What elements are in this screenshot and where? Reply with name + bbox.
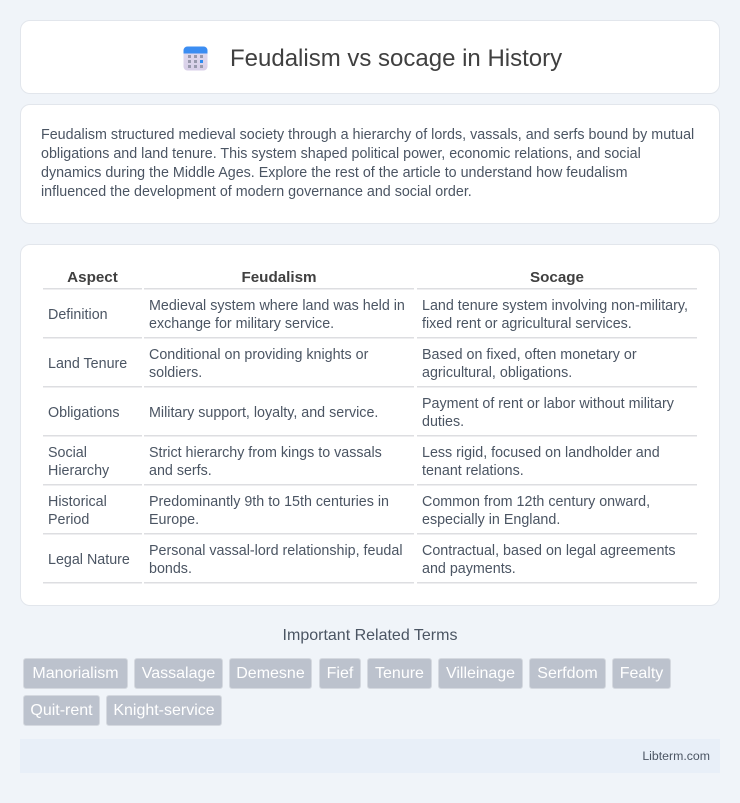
panel: header <box>20 20 720 94</box>
row: Land Tenure <box>48 347 637 381</box>
text block: introduction: obligations and land tenure. This system shaped political power, economic relations, and social <box>41 146 641 162</box>
row: Legal Nature: and payments. <box>422 561 516 577</box>
row: Obligations: Military support, loyalty, and service. <box>149 405 378 421</box>
row: Historical Period: Historical <box>48 494 107 510</box>
row: Definition: Definition <box>48 307 108 323</box>
row: Social Hierarchy: and serfs. <box>149 463 212 479</box>
row: Land Tenure: agricultural, obligations. <box>422 365 572 381</box>
row: Social Hierarchy: Strict hierarchy from kings to vassals <box>149 445 382 461</box>
row: Obligations: Payment of rent or labor without military <box>422 396 674 412</box>
tags: related terms: Fealty <box>620 665 663 682</box>
row: Land Tenure: Based on fixed, often monetary or <box>422 347 637 363</box>
row: Definition: Medieval system where land was held in <box>149 298 405 314</box>
row: Definition: Land tenure system involving non-military, <box>422 298 688 314</box>
row: Social Hierarchy: tenant relations. <box>422 463 524 479</box>
table header: Socage: Socage <box>530 269 584 286</box>
tags: related terms: Demesne <box>236 665 305 682</box>
row: Definition <box>48 298 688 332</box>
row: Social Hierarchy: Less rigid, focused on landholder and <box>422 445 660 461</box>
table header: Feudalism: Feudalism <box>241 269 317 286</box>
row: Historical Period: especially in England. <box>422 512 560 528</box>
tags: related terms: Serfdom <box>537 665 598 682</box>
row: Obligations: duties. <box>422 414 464 430</box>
row: Definition: exchange for military service. <box>149 316 334 332</box>
table header: Aspect: Aspect <box>67 269 118 286</box>
footer <box>20 739 720 773</box>
tags: related terms: Manorialism <box>32 665 119 682</box>
icon: calendar <box>184 46 208 70</box>
row: Definition: fixed rent or agricultural services. <box>422 316 632 332</box>
tags: related terms: Tenure <box>375 665 424 682</box>
row: Historical Period: Common from 12th century onward, <box>422 494 650 510</box>
row: Land Tenure: Conditional on providing knights or <box>149 347 368 363</box>
row: Historical Period: Europe. <box>149 512 199 528</box>
row: Land Tenure: soldiers. <box>149 365 202 381</box>
panel: introduction <box>20 104 720 224</box>
row: Legal Nature: Personal vassal-lord relationship, feudal <box>149 543 403 559</box>
footer credit: Libterm.com <box>642 749 710 763</box>
title: Feudalism vs socage in History <box>230 45 562 72</box>
tags: related terms: Fief <box>327 665 353 682</box>
text block: introduction: influenced the development of modern governance and social order. <box>41 184 472 200</box>
panel: comparison table <box>20 244 720 606</box>
tags: related terms: Knight-service <box>113 702 215 719</box>
row: Land Tenure: Land Tenure <box>48 356 127 372</box>
tags: related terms <box>23 658 671 726</box>
row: Obligations: Obligations <box>48 405 120 421</box>
row: Obligations <box>48 396 674 430</box>
text block: introduction: Feudalism structured medieval society through a hierarchy of lords, vassals, and serfs bound by mutual <box>41 127 694 143</box>
heading: Important Related Terms: Important Related Terms <box>283 627 457 644</box>
row: Legal Nature: Legal Nature <box>48 552 130 568</box>
row: Historical Period <box>48 494 650 528</box>
row: Legal Nature: Contractual, based on legal agreements <box>422 543 676 559</box>
text block: introduction: dynamics during the Middle Ages. Explore the rest of the article to understand how feudalism <box>41 165 628 181</box>
row: Historical Period: Predominantly 9th to 15th centuries in <box>149 494 389 510</box>
tags: related terms: Vassalage <box>142 665 215 682</box>
tags: related terms: Villeinage <box>446 665 515 682</box>
row: Legal Nature <box>48 543 676 577</box>
row: Legal Nature: bonds. <box>149 561 192 577</box>
row: Social Hierarchy <box>48 445 660 479</box>
row: Social Hierarchy: Hierarchy <box>48 463 109 479</box>
tags: related terms: Quit-rent <box>30 702 93 719</box>
row: Historical Period: Period <box>48 512 89 528</box>
text block: introduction <box>41 127 694 200</box>
row: Social Hierarchy: Social <box>48 445 87 461</box>
